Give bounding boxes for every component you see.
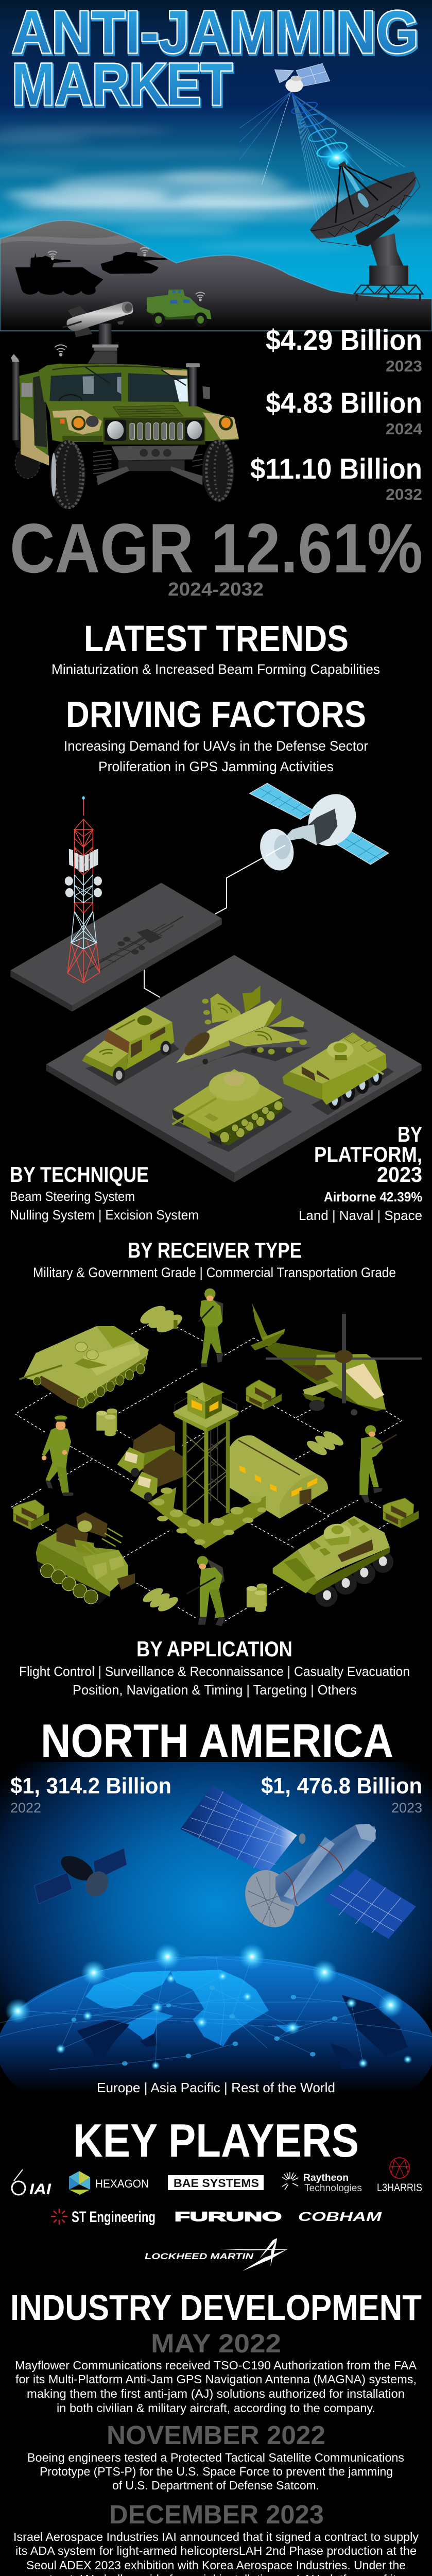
by receiver type: BY RECEIVER TYPE (128, 1238, 302, 1262)
military base isometric illustration (11, 1289, 422, 1626)
development: May 2022: Mayflower Communications received TSO-C190 Authorization from the FAA (15, 2359, 417, 2372)
mountains (0, 221, 432, 331)
icon: fighter jet (176, 986, 312, 1073)
logo: Hexagon (69, 2171, 149, 2195)
panel: tower platform (10, 883, 222, 1012)
by platform: Airborne 42.39% (324, 1189, 422, 1205)
icon: wheeled armored carrier (282, 1032, 394, 1115)
icon: armored personnel carrier (273, 1516, 393, 1607)
logo: ST Engineering (51, 2209, 155, 2226)
title: MARKET (13, 53, 233, 119)
icon: crates right (383, 1498, 419, 1528)
by platform: BY (398, 1122, 422, 1146)
icon: rifleman right (359, 1425, 397, 1503)
regional values (10, 1773, 422, 1816)
development: May 2022: making them the first anti-jam (AJ) solutions authorized for installation (27, 2387, 405, 2400)
icon: armored humvee (11, 354, 239, 509)
by receiver type (33, 1238, 396, 1280)
market size values: 2023 (386, 357, 422, 375)
logo: L3Harris (377, 2158, 422, 2194)
logo: Furuno: FURUNO (175, 2210, 282, 2224)
key players heading: KEY PLAYERS (73, 2115, 359, 2167)
title: MARKET (12, 52, 232, 117)
by technique (10, 1162, 199, 1223)
icon: small satellite (34, 1848, 127, 1904)
regional values: $1, 314.2 Billion (10, 1773, 171, 1799)
icon: military jeep (82, 1007, 179, 1086)
development: November 2022: Prototype (PTS-P) for the U.S. Space Force to prevent the jamming (40, 2465, 393, 2478)
by platform: Land | Naval | Space (299, 1208, 422, 1223)
icon: radar dish (310, 161, 420, 285)
market size values: $4.29 Billion (266, 324, 422, 356)
development: November 2022: NOVEMBER 2022 (107, 2420, 325, 2450)
hero scene: sky, satellite, dish and mountains (0, 0, 432, 331)
title (12, 0, 420, 119)
latest trends: LATEST TRENDS (84, 619, 349, 659)
development: November 2022 (27, 2420, 404, 2492)
north america heading: NORTH AMERICA (41, 1715, 393, 1767)
development: May 2022: in both civilian & military aircraft, according to the company. (57, 2401, 375, 2415)
by application: Position, Navigation & Timing | Targeting | Others (73, 1682, 357, 1698)
icon: helicopter (251, 1303, 422, 1415)
icon: soldier bottom (187, 1556, 226, 1626)
logo: Raytheon Technologies (282, 2172, 362, 2194)
by application (19, 1637, 410, 1698)
logo: Raytheon Technologies: Technologies (304, 2183, 362, 2194)
icon: shell stack right (303, 1429, 347, 1457)
by receiver type: Military & Government Grade | Commercial Transportation Grade (33, 1265, 396, 1280)
logo: BAE Systems: BAE SYSTEMS (174, 2177, 259, 2190)
icon: wifi signal on armored vehicle (196, 292, 205, 301)
market size values: 2024 (386, 420, 423, 438)
by platform: 2023 (377, 1162, 422, 1187)
icon: green armored vehicle (147, 290, 211, 327)
icon: barrels top (96, 1409, 117, 1436)
tower shadow (83, 917, 183, 972)
icon: battle tank (172, 1069, 292, 1152)
regional values: 2023 (391, 1800, 422, 1816)
icon: barracks hut (229, 1435, 328, 1518)
by technique: Beam Steering System (10, 1189, 135, 1204)
icon: soldier walking top (198, 1289, 223, 1367)
icon: anti-aircraft tracked vehicle (36, 1512, 135, 1605)
by application: BY APPLICATION (136, 1637, 292, 1661)
development: December 2023: its ADA system for light-armed helicoptersLAH 2nd Phase production at the (15, 2544, 417, 2557)
icon: barrels bottom (247, 1584, 267, 1612)
clouds (0, 127, 432, 249)
development: November 2022: Boeing engineers tested a Protected Tactical Satellite Communications (27, 2451, 404, 2464)
development: December 2023: Israel Aerospace Industries IAI announced that it signed a contract to supply (13, 2530, 419, 2544)
latest trends: Miniaturization & Increased Beam Forming Capabilities (51, 662, 380, 677)
regional values: $1, 476.8 Billion (261, 1773, 422, 1799)
by platform (299, 1122, 422, 1223)
regional values: 2022 (10, 1800, 41, 1816)
market size values (250, 324, 423, 503)
by technique: Nulling System | Excision System (10, 1207, 199, 1223)
latest trends (51, 619, 380, 677)
development: December 2023: DECEMBER 2023 (109, 2500, 324, 2529)
logo: Lockheed Martin: LOCKHEED MARTIN (145, 2251, 254, 2261)
panel: defence vehicles platform (46, 955, 422, 1182)
driving factors: DRIVING FACTORS (66, 694, 366, 735)
market size values: $11.10 Billion (250, 452, 422, 485)
icon: large space station satellite (180, 1785, 416, 1939)
icon: watchtower (173, 1382, 239, 1524)
icon: wifi signal small 2 (140, 247, 149, 256)
icon: tank silhouette left (15, 253, 103, 295)
icon: sandbag wall (148, 1487, 266, 1549)
logo: IAI (12, 2170, 51, 2198)
logo: IAI: IAI (29, 2181, 51, 2198)
key player logos (12, 2158, 422, 2271)
icon: wifi signal on humvee (55, 345, 67, 356)
by technique: BY TECHNIQUE (10, 1162, 149, 1187)
icon: top tank (19, 1326, 149, 1409)
by application: Flight Control | Surveillance & Reconnaissance | Casualty Evacuation (19, 1664, 410, 1679)
market size values: $4.83 Billion (266, 386, 422, 419)
logo: Raytheon Technologies: Raytheon (303, 2173, 349, 2183)
icon: shell stacks top (135, 1303, 187, 1335)
dashed connectors (11, 1324, 402, 1621)
development: May 2022 (15, 2329, 417, 2415)
development: December 2023: Seoul ADEX 2023 exhibition with Korea Aerospace Industries. Under the (26, 2558, 406, 2572)
development: May 2022: MAY 2022 (151, 2329, 281, 2358)
icon: communication satellite (250, 783, 388, 872)
icon: missile launcher (63, 299, 133, 364)
other regions: Europe | Asia Pacific | Rest of the World (97, 2080, 335, 2095)
driving factors: Increasing Demand for UAVs in the Defense Sector (64, 738, 368, 754)
logo: ST Engineering: ST Engineering (72, 2209, 155, 2226)
icon: crates left (13, 1500, 49, 1530)
icon: tank silhouette right (100, 252, 167, 274)
icon: stacked crates top right (246, 1380, 282, 1410)
dish base lattice (354, 285, 423, 301)
icon: shell stack bottom (140, 1586, 182, 1613)
icon: telecom lattice tower (65, 796, 102, 983)
icon: wifi signal small (48, 251, 57, 260)
development: November 2022: of U.S. Department of Defense Satcom. (112, 2479, 319, 2492)
driving factors (64, 694, 368, 774)
development: December 2023 (13, 2500, 419, 2576)
logo: L3Harris: L3HARRIS (377, 2182, 422, 2194)
driving factors: Proliferation in GPS Jamming Activities (98, 759, 334, 774)
globe with continents (0, 1943, 432, 2141)
development: May 2022: for its Multi-Platform Anti-Jam GPS Navigation Antenna (MAGNA) systems, (15, 2372, 417, 2386)
connector lines (144, 857, 265, 997)
market size values: 2032 (386, 485, 422, 503)
icon: satellite with signal beam (239, 63, 405, 223)
logo: Cobham: COBHAM (298, 2210, 383, 2224)
icon: cargo truck (117, 1423, 183, 1501)
logo: Hexagon: HEXAGON (95, 2177, 149, 2190)
CAGR figure: 2024-2032 (168, 579, 264, 600)
logo: Lockheed Martin (145, 2238, 287, 2271)
regional globe background (0, 1762, 432, 2141)
icon: officer (42, 1415, 73, 1496)
